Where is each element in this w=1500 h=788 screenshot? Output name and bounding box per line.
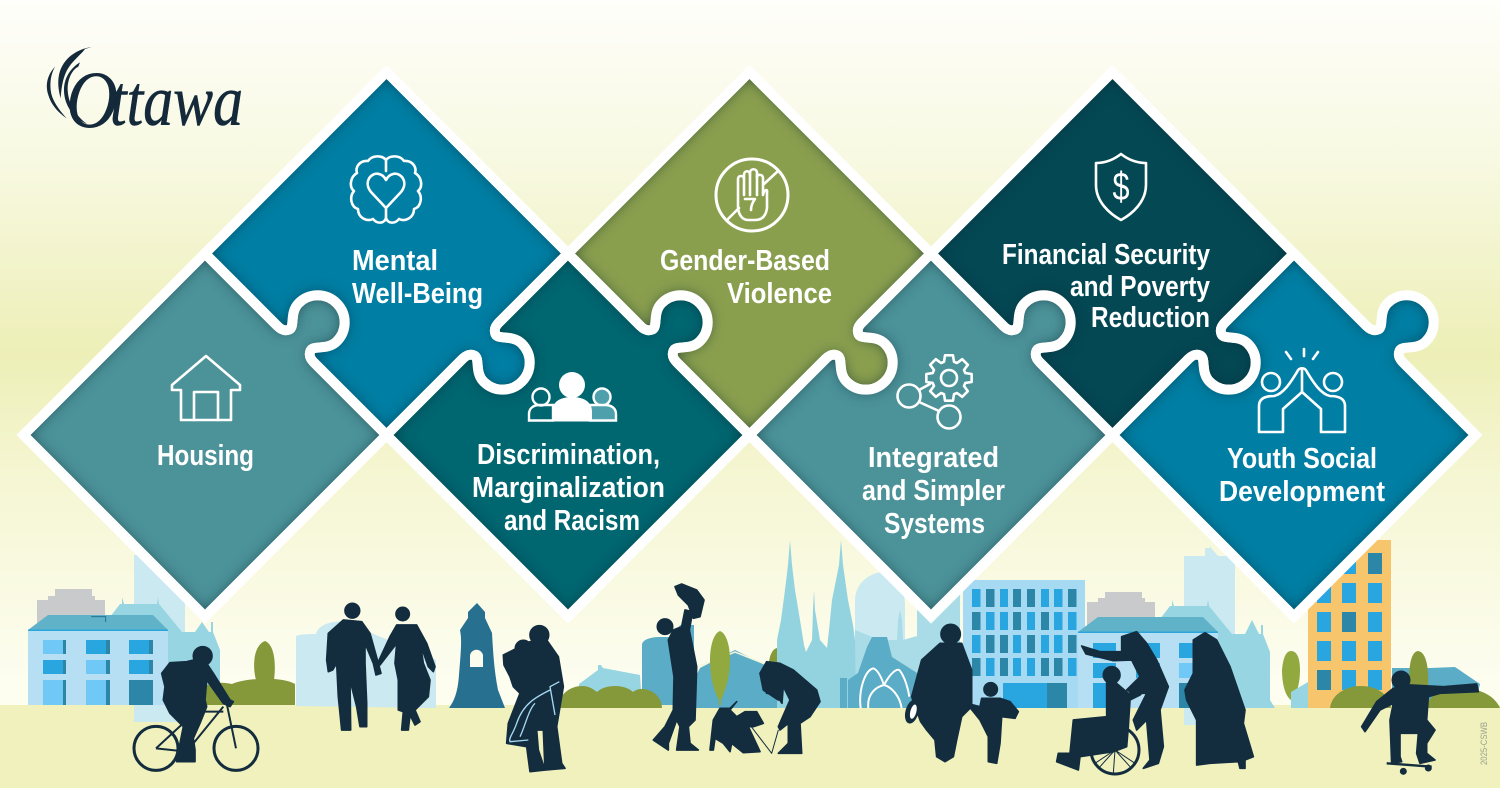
large person with bag bbox=[904, 624, 972, 762]
icon: three people bbox=[529, 372, 616, 422]
puzzle piece: Integrated and Simpler Systems bbox=[750, 254, 1112, 616]
label: Integrated and Simpler Systems: Integrated bbox=[868, 442, 999, 474]
silhouettes centre: parent, dog walker, family bbox=[503, 584, 1018, 772]
icon: shield with dollar bbox=[1096, 154, 1146, 220]
tree beside apartment bbox=[1282, 651, 1300, 706]
logo wordmark: O bbox=[66, 54, 118, 145]
teal back building right bbox=[1160, 600, 1275, 708]
label: Discrimination, Marginalization and Racism: Discrimination, bbox=[477, 439, 660, 471]
pale tower bbox=[134, 555, 185, 722]
father lifting baby bbox=[653, 584, 704, 750]
puzzle piece: Financial Security and Poverty Reduction bbox=[931, 72, 1294, 435]
silhouettes left: cyclist and couple bbox=[134, 603, 435, 770]
label: Discrimination, Marginalization and Racism: and Racism bbox=[504, 505, 640, 537]
puzzle piece: Housing bbox=[24, 254, 386, 616]
mother carrying child bbox=[503, 626, 565, 772]
pale shed bbox=[1291, 682, 1308, 708]
left skyline: apartment and trees bbox=[28, 555, 505, 722]
dog bbox=[710, 702, 778, 753]
pale right tower bbox=[1184, 545, 1235, 725]
label: Youth Social Development: Youth Social bbox=[1227, 443, 1377, 475]
puzzle piece: Youth Social Development bbox=[1112, 254, 1476, 616]
hills right bbox=[1330, 686, 1500, 708]
tree and hill bbox=[186, 641, 295, 705]
label: Mental Well-Being: Mental bbox=[352, 245, 438, 277]
low house bbox=[690, 650, 785, 708]
label: Mental Well-Being: Well-Being bbox=[352, 278, 483, 310]
central skyline: houses, cathedral and fountain bbox=[558, 540, 960, 708]
label: Gender-Based Violence bbox=[660, 245, 832, 310]
label: Financial Security and Poverty Reduction: and Poverty bbox=[1070, 271, 1210, 303]
bushes bbox=[558, 686, 662, 708]
label: Mental Well-Being bbox=[352, 245, 483, 310]
grey stepped building bbox=[37, 589, 105, 625]
robed woman bbox=[1185, 633, 1253, 768]
caregiver and wheelchair user bbox=[1057, 632, 1168, 774]
pale tower behind cathedral bbox=[855, 572, 905, 640]
orange apartment bbox=[1308, 540, 1391, 708]
cathedral spires bbox=[777, 540, 856, 708]
cyclist bbox=[134, 647, 258, 770]
office tower bbox=[963, 580, 1085, 708]
label: Housing: Housing bbox=[157, 440, 254, 472]
label: Youth Social Development bbox=[1219, 443, 1385, 508]
puzzle piece: Mental Well-Being bbox=[205, 72, 568, 435]
hair bbox=[761, 662, 784, 703]
couple holding hands bbox=[327, 603, 435, 730]
puzzle piece: Discrimination, Marginalization and Racism bbox=[386, 254, 750, 616]
apartment building bbox=[28, 615, 168, 705]
domed museum bbox=[840, 637, 917, 708]
icon: stop hand in circle bbox=[716, 159, 788, 231]
icon: brain with heart bbox=[351, 156, 421, 223]
label: Youth Social Development: Development bbox=[1219, 476, 1385, 508]
icon: gear and network bbox=[898, 355, 972, 428]
right skyline: offices and apartment bbox=[963, 540, 1500, 725]
icon: house bbox=[172, 356, 240, 420]
icon: shield with dollar: $ bbox=[1112, 165, 1130, 209]
low apartment right bbox=[1078, 617, 1218, 708]
skateboarder bbox=[1362, 671, 1478, 774]
logo swirl bbox=[47, 47, 92, 124]
label: Integrated and Simpler Systems: and Simpler bbox=[862, 475, 1005, 507]
teal back building bbox=[110, 597, 220, 705]
small tree bbox=[768, 648, 786, 690]
label: Integrated and Simpler Systems bbox=[862, 442, 1005, 540]
label: Discrimination, Marginalization and Racism: Marginalization bbox=[472, 472, 665, 504]
spider fountain bbox=[860, 668, 909, 708]
label: Integrated and Simpler Systems: Systems bbox=[884, 508, 985, 540]
far house bbox=[1392, 667, 1480, 700]
grey stepped building right bbox=[1087, 592, 1155, 627]
label: Discrimination, Marginalization and Racism bbox=[472, 439, 665, 537]
monument bbox=[449, 603, 505, 708]
label: Gender-Based Violence: Gender-Based bbox=[660, 245, 830, 277]
poplar tree bbox=[710, 631, 730, 705]
logo wordmark letters: ttawa bbox=[110, 61, 243, 141]
label: Financial Security and Poverty Reduction: Financial Security bbox=[1002, 239, 1210, 271]
cathedral backdrop bbox=[855, 580, 960, 708]
pale buildings behind couple bbox=[296, 622, 436, 708]
pale roofed house bbox=[579, 665, 642, 705]
ground band bbox=[0, 705, 1500, 788]
woman bending over bbox=[760, 662, 820, 753]
icon: high five bbox=[1259, 349, 1345, 432]
Ottawa logo bbox=[47, 47, 243, 145]
label: Financial Security and Poverty Reduction bbox=[1002, 239, 1210, 334]
child holding hand bbox=[967, 683, 1018, 763]
round tower bbox=[642, 625, 694, 705]
tree right bbox=[1409, 651, 1428, 690]
document code: 2025-CSWB bbox=[1479, 722, 1490, 765]
puzzle piece: Gender-Based Violence bbox=[568, 72, 931, 435]
label: Financial Security and Poverty Reduction: Reduction bbox=[1091, 302, 1210, 334]
silhouettes right: wheelchair group, robed woman, skateboarder bbox=[1057, 632, 1478, 774]
label: Gender-Based Violence: Violence bbox=[727, 278, 832, 310]
